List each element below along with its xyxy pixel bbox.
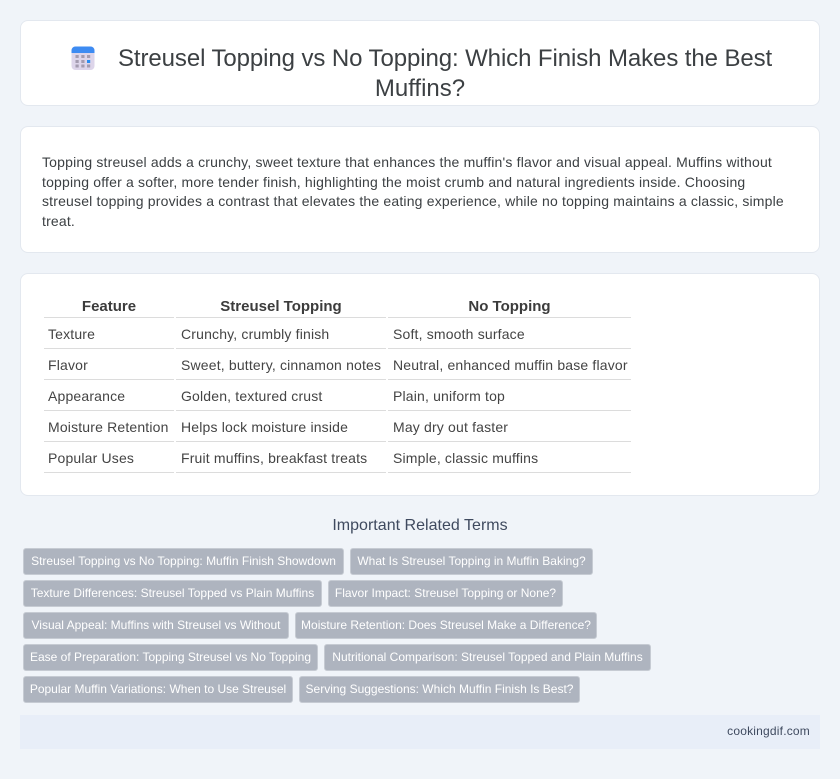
intro paragraph: Topping streusel adds a crunchy, sweet texture that enhances the muffin's flavor and visual appeal. Muffins without — [42, 154, 772, 170]
related terms tags: Serving Suggestions: Which Muffin Finish Is Best? — [306, 682, 573, 696]
title: Streusel Topping vs No Topping: Which Finish Makes the Best — [118, 45, 772, 72]
table: Appearance — [48, 388, 125, 404]
related terms tags — [23, 548, 651, 703]
table: Flavor — [48, 357, 88, 373]
footer bar — [20, 715, 820, 749]
related terms tags: Nutritional Comparison: Streusel Topped and Plain Muffins — [332, 650, 643, 664]
table: Fruit muffins, breakfast treats — [181, 450, 367, 466]
intro text panel — [20, 126, 820, 253]
table: Crunchy, crumbly finish — [181, 326, 329, 342]
table: May dry out faster — [393, 419, 508, 435]
table: Texture — [48, 326, 95, 342]
related terms tags: Visual Appeal: Muffins with Streusel vs Without — [31, 618, 280, 632]
related terms tags: What Is Streusel Topping in Muffin Baking? — [357, 554, 586, 568]
related terms tags: Ease of Preparation: Topping Streusel vs No Topping — [30, 650, 311, 664]
related terms tags: Streusel Topping vs No Topping: Muffin Finish Showdown — [31, 554, 336, 568]
table: No Topping — [468, 298, 551, 315]
title — [118, 45, 772, 102]
table: Sweet, buttery, cinnamon notes — [181, 357, 381, 373]
comparison table panel — [20, 273, 820, 496]
related terms tags: Texture Differences: Streusel Topped vs Plain Muffins — [31, 586, 314, 600]
table: Helps lock moisture inside — [181, 419, 348, 435]
table: Moisture Retention — [48, 419, 169, 435]
intro paragraph: topping offer a softer, more tender finish, highlighting the moist crumb and natural ingredients inside. Choosing — [42, 174, 745, 190]
icon: calendar — [72, 46, 94, 70]
table: Popular Uses — [48, 450, 134, 466]
related terms tags: Moisture Retention: Does Streusel Make a Difference? — [301, 618, 591, 632]
table: Neutral, enhanced muffin base flavor — [393, 357, 628, 373]
intro paragraph: treat. — [42, 212, 75, 228]
table: Golden, textured crust — [181, 388, 322, 404]
table — [44, 298, 631, 473]
table: Streusel Topping — [220, 298, 342, 315]
table: Plain, uniform top — [393, 388, 505, 404]
title: Muffins? — [375, 75, 465, 102]
table: Feature — [82, 298, 136, 315]
footer source: cookingdif.com — [727, 724, 810, 738]
intro paragraph: streusel topping provides a contrast that elevates the eating experience, while no topping maintains a classic, simple — [42, 193, 784, 209]
table: Soft, smooth surface — [393, 326, 525, 342]
intro paragraph — [42, 154, 784, 228]
related terms tags: Flavor Impact: Streusel Topping or None? — [335, 586, 556, 600]
related terms tags: Popular Muffin Variations: When to Use Streusel — [30, 682, 286, 696]
table: Simple, classic muffins — [393, 450, 538, 466]
title panel — [20, 20, 820, 106]
related terms heading: Important Related Terms — [332, 517, 508, 534]
